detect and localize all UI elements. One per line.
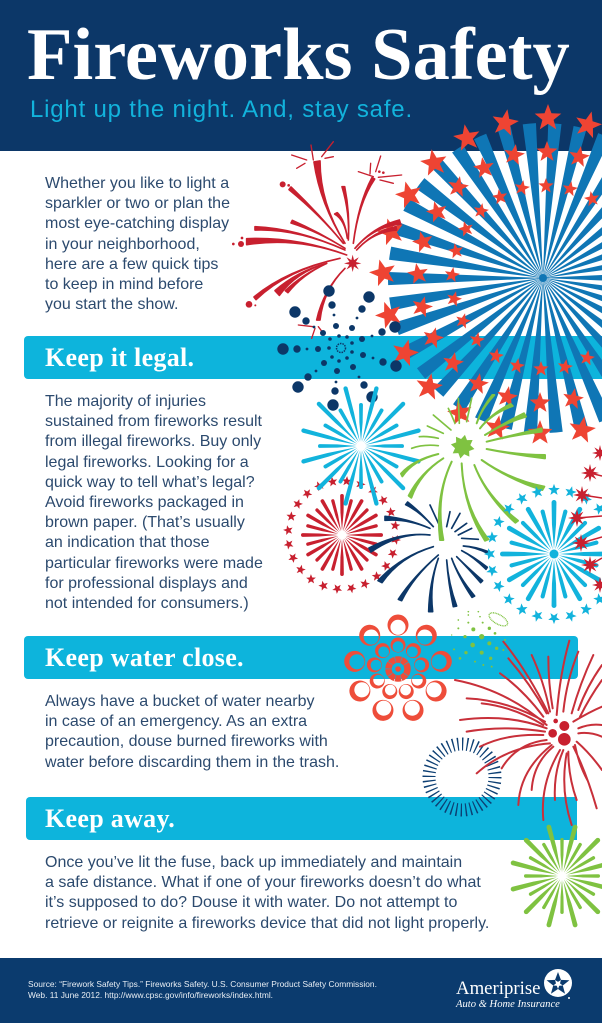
logo wordmark: Ameriprise [456,978,540,999]
section band: keep water close [24,636,578,679]
firework: red burst lower right [455,641,602,825]
away text: retrieve or reignite a fireworks device that did not light properly. [45,915,489,932]
firework: navy dots [277,285,402,411]
water text: precaution, douse burned fireworks with [45,733,328,750]
title: Fireworks Safety [27,14,570,96]
logo emblem [544,969,572,999]
intro text: here are a few quick tips [45,256,218,273]
legal text: Avoid fireworks packaged in [45,494,244,511]
footer band [0,958,602,1023]
legal text: brown paper. (That’s usually [45,514,245,531]
subtitle: Light up the night. And, stay safe. [30,96,413,123]
away text: it’s supposed to do? Douse it with water. Do not attempt to [45,894,457,911]
firework: cyan burst [285,370,437,522]
firework: lime dots [451,610,510,668]
legal text: quick way to tell what’s legal? [45,474,255,491]
source citation: Web. 11 June 2012. http://www.cpsc.gov/info/fireworks/index.html. [28,990,273,1000]
away text: a safe distance. What if one of your fireworks doesn’t do what [45,874,481,891]
legal text: sustained from fireworks result [45,413,262,430]
legal text: particular fireworks were made [45,555,263,572]
legal text [45,393,263,612]
header band [0,0,602,151]
legal text: legal fireworks. Looking for a [45,454,249,471]
legal text: not intended for consumers.) [45,595,249,612]
firework: navy tick ring [429,744,495,810]
firework: dark red spiky stars on right edge [568,445,602,593]
heading: keep it legal: Keep it legal. [45,343,194,372]
firework: navy curved burst [369,502,488,612]
source citation [28,979,377,1000]
intro text [45,175,230,313]
heading: keep away: Keep away. [45,804,175,833]
intro text: most eye-catching display [45,215,229,232]
intro text: sparkler or two or plan the [45,195,230,212]
firework: green burst lower right [497,811,602,941]
intro text: to keep in mind before [45,276,203,293]
water text: water before discarding them in the trash. [45,754,339,771]
water text: Always have a bucket of water nearby [45,693,314,710]
source citation: Source: “Firework Safety Tips.” Fireworks Safety. U.S. Consumer Product Safety Commission. [28,979,377,989]
firework: green burst [401,395,545,541]
intro text: Whether you like to light a [45,175,229,192]
water text: in case of an emergency. As an extra [45,713,307,730]
intro text: in your neighborhood, [45,236,200,253]
firework: large blue sunburst with red stars [367,104,602,444]
firework: red fountain at top [232,142,402,338]
legal text: from illegal fireworks. Buy only [45,433,261,450]
legal text: an indication that those [45,534,210,551]
legal text: The majority of injuries [45,393,206,410]
firework: red sunburst with star ring [278,471,406,599]
heading: keep water close: Keep water close. [45,643,244,672]
firework: cyan sunburst with star ring [484,484,602,624]
water text [45,693,339,771]
logo tagline: Auto & Home Insurance [456,999,560,1010]
firework: orange crescent rosette [343,614,453,724]
legal text: for professional displays and [45,575,248,592]
intro text: you start the show. [45,296,178,313]
section band: keep it legal [24,336,602,379]
away text [45,854,489,932]
section band: keep away [26,797,577,840]
away text: Once you’ve lit the fuse, back up immediately and maintain [45,854,462,871]
